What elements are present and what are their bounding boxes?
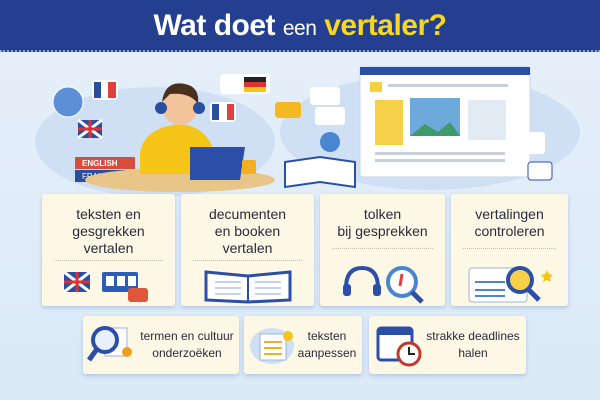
- card: termen onderzoeken: onderzoëken: [152, 346, 222, 360]
- card: teksten vertalen: vertalen: [84, 240, 133, 256]
- card: documenten: [181, 194, 314, 306]
- card: documenten: vertalen: [223, 240, 272, 256]
- card: controleren: vertalingen: [475, 206, 544, 222]
- card: termen onderzoeken: [83, 316, 239, 374]
- card: deadlines: halen: [458, 346, 488, 360]
- illustration: translator at desk: ENGLISH: [82, 159, 118, 168]
- card: documenten: en booken: [215, 223, 280, 239]
- card: tolken: [320, 194, 445, 306]
- card: teksten aanpassen: teksten: [308, 329, 346, 343]
- illustration: documents and website: [275, 66, 580, 190]
- illustration: translator at desk: [35, 74, 275, 196]
- title: Wat doet een vertaler?: [153, 9, 446, 42]
- icon: calendar clock: [376, 326, 422, 366]
- card: deadlines: strakke deadlines: [426, 329, 520, 343]
- card: deadlines: [369, 316, 526, 374]
- card: documenten: decumenten: [209, 206, 286, 222]
- icon: magnifier doc: [87, 326, 132, 362]
- card: teksten vertalen: gesgrekken: [72, 223, 145, 239]
- card: teksten aanpassen: aanpessen: [298, 346, 356, 360]
- card: controleren: controleren: [474, 223, 545, 239]
- header banner: [0, 0, 600, 52]
- card: teksten vertalen: teksten en: [76, 206, 141, 222]
- card: teksten aanpassen: [244, 316, 362, 374]
- card: controleren: [451, 194, 568, 306]
- card: termen onderzoeken: termen en cultuur: [140, 329, 234, 343]
- card: tolken: bij gesprekken: [337, 223, 428, 239]
- icon: checklist magnifier: [468, 266, 553, 302]
- card: tolken: tolken: [364, 206, 401, 222]
- card: teksten vertalen: [42, 194, 175, 306]
- icon: flag chat: [63, 271, 148, 302]
- icon: document star: [250, 328, 294, 364]
- icon: headphones and magnifier: [343, 266, 424, 304]
- icon: open book: [204, 270, 292, 304]
- illustration: translator at desk: FRANÇAIS: [82, 172, 122, 181]
